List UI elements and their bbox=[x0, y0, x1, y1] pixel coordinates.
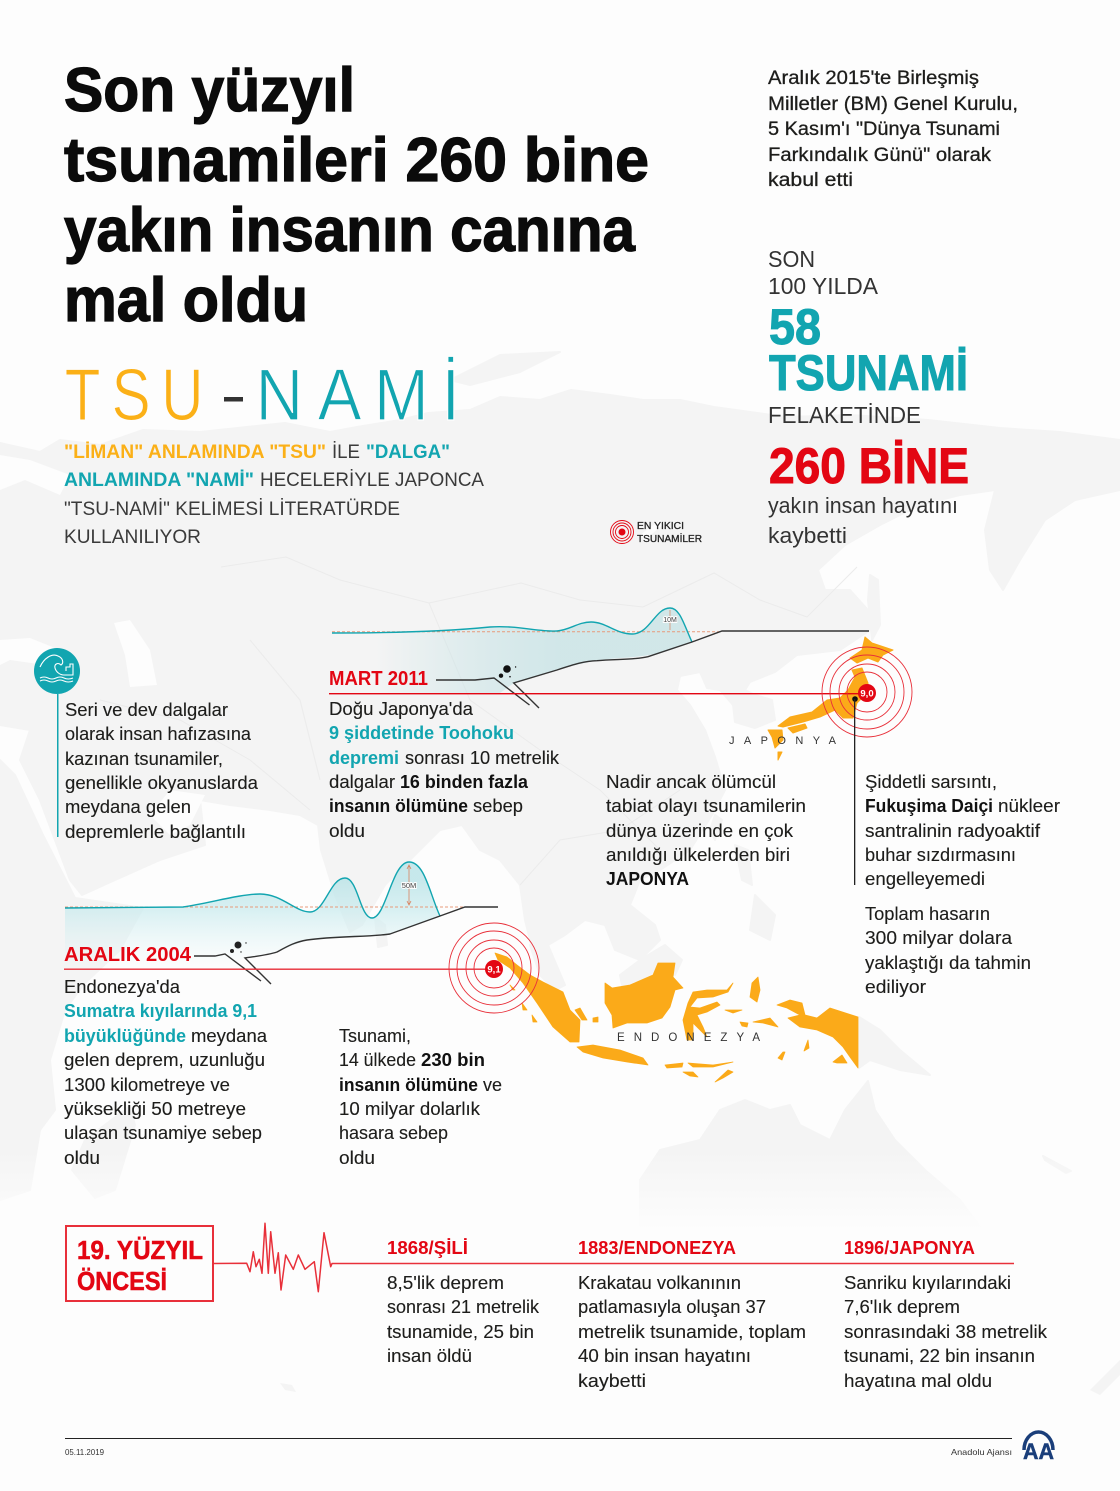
logo: AA: AA bbox=[1023, 1439, 1054, 1464]
TSU-NAMI wordmark: TSU bbox=[65, 355, 203, 437]
event 1883 Indonesia: metrelik tsunamide, toplam bbox=[578, 1322, 806, 1342]
map: Indonesia bbox=[495, 953, 858, 1082]
epicentre: Japan 9,0 bbox=[822, 647, 912, 737]
event 1883 Indonesia: 1883/ENDONEZYA bbox=[578, 1238, 736, 1258]
event 1883 Indonesia: kaybetti bbox=[578, 1371, 646, 1391]
footer rule bbox=[65, 1438, 1012, 1439]
March 2011 text block: sonrası 10 metrelik bbox=[405, 748, 560, 768]
March 2011 text block: dalgalar bbox=[329, 772, 395, 792]
Japan note bbox=[606, 772, 806, 889]
intro paragraph: Seri ve dev dalgalar bbox=[65, 700, 228, 720]
title: Son yüzyıl bbox=[64, 56, 355, 125]
Fukushima note: Şiddetli sarsıntı, bbox=[865, 772, 997, 792]
damage note: Toplam hasarın bbox=[865, 904, 990, 924]
event 1896 Japan: sonrasındaki 38 metrelik bbox=[844, 1322, 1048, 1342]
key statistics: 260 BİNE bbox=[769, 438, 969, 494]
tsunami impact note: 10 milyar dolarlık bbox=[339, 1099, 481, 1119]
diagram: December 2004 tsunami profile bbox=[65, 862, 498, 984]
key statistics: kaybetti bbox=[768, 523, 847, 548]
label: Endonezya: ENDONEZYA bbox=[617, 1032, 760, 1044]
March 2011 text block: 16 binden fazla bbox=[400, 772, 529, 792]
December 2004 text block: 1300 kilometreye ve bbox=[64, 1075, 230, 1095]
December 2004 text block: Endonezya'da bbox=[64, 977, 181, 997]
March 2011 text block: sebep bbox=[473, 796, 523, 816]
intro note: Milletler (BM) Genel Kurulu, bbox=[768, 93, 1018, 115]
tsunami impact note: oldu bbox=[339, 1148, 375, 1168]
key statistics: yakın insan hayatını bbox=[768, 493, 958, 518]
event 1868 Chile: insan öldü bbox=[387, 1346, 472, 1366]
etymology text: "LİMAN" ANLAMINDA "TSU" bbox=[64, 442, 326, 463]
legend: most destructive tsunamis bbox=[610, 520, 702, 545]
event 1868 Chile: sonrası 21 metrelik bbox=[387, 1297, 540, 1317]
legend: most destructive tsunamis: EN YIKICI bbox=[637, 520, 684, 532]
key statistics: SON bbox=[768, 246, 815, 272]
Fukushima note: santralinin radyoaktif bbox=[865, 821, 1041, 841]
intro paragraph: meydana gelen bbox=[65, 797, 191, 817]
damage note: ediliyor bbox=[865, 977, 926, 997]
event 1868 Chile: 1868/ŞİLİ bbox=[387, 1238, 468, 1258]
December 2004 text block: ulaşan tsunamiye sebep bbox=[64, 1123, 262, 1143]
event 1868 Chile: 8,5'lik deprem bbox=[387, 1273, 504, 1293]
etymology text: "TSU-NAMİ" KELİMESİ LİTERATÜRDE bbox=[64, 499, 400, 520]
legend: most destructive tsunamis: TSUNAMİLER bbox=[637, 532, 702, 545]
box: pre-19th century bbox=[66, 1226, 213, 1301]
intro paragraph: depremlerle bağlantılı bbox=[65, 822, 246, 842]
diagram: March 2011 tsunami profile: 10M bbox=[663, 617, 677, 624]
event 1896 Japan: Sanriku kıyılarındaki bbox=[844, 1273, 1011, 1293]
December 2004 text block: oldu bbox=[64, 1148, 100, 1168]
Japan note: JAPONYA bbox=[606, 869, 689, 889]
seismograph timeline line bbox=[213, 1223, 1014, 1292]
event 1868 Chile bbox=[387, 1238, 540, 1366]
etymology text: İLE bbox=[332, 442, 360, 463]
event 1883 Indonesia: Krakatau volkanının bbox=[578, 1273, 741, 1293]
etymology text: "DALGA" bbox=[366, 442, 450, 463]
intro note bbox=[768, 67, 1018, 191]
tsunami impact note: ve bbox=[483, 1075, 502, 1095]
December 2004 text block bbox=[64, 944, 268, 1168]
title: tsunamileri 260 bine bbox=[64, 126, 649, 195]
event 1896 Japan: 7,6'lık deprem bbox=[844, 1297, 960, 1317]
event 1896 Japan: 1896/JAPONYA bbox=[844, 1238, 975, 1258]
key statistics: 58 bbox=[769, 299, 821, 355]
event 1883 Indonesia bbox=[578, 1238, 806, 1391]
tsunami impact note: Tsunami, bbox=[339, 1026, 411, 1046]
TSU-NAMI wordmark: NAMİ bbox=[256, 354, 460, 436]
event 1896 Japan: hayatına mal oldu bbox=[844, 1371, 992, 1391]
intro paragraph bbox=[65, 700, 259, 842]
key statistics: 100 YILDA bbox=[768, 273, 879, 299]
key statistics: TSUNAMİ bbox=[769, 345, 968, 401]
intro paragraph: kazınan tsunamiler, bbox=[65, 749, 223, 769]
box: pre-19th century: ÖNCESİ bbox=[77, 1266, 167, 1296]
etymology text: ANLAMINDA "NAMİ" bbox=[64, 470, 254, 491]
Japan note: Nadir ancak ölümcül bbox=[606, 772, 776, 792]
title: mal oldu bbox=[64, 266, 308, 335]
damage note: 300 milyar dolara bbox=[865, 928, 1013, 948]
December 2004 text block: büyüklüğünde bbox=[64, 1026, 186, 1046]
Fukushima pointer bbox=[852, 696, 858, 885]
tsunami impact note: insanın ölümüne bbox=[339, 1075, 478, 1095]
December 2004 text block: meydana bbox=[191, 1026, 268, 1046]
intro note: Aralık 2015'te Birleşmiş bbox=[768, 67, 979, 89]
event 1896 Japan: tsunami, 22 bin insanın bbox=[844, 1346, 1035, 1366]
title bbox=[64, 56, 649, 335]
credit: Anadolu Ajansı bbox=[951, 1447, 1012, 1457]
box: pre-19th century: 19. YÜZYIL bbox=[77, 1235, 203, 1265]
etymology text: KULLANILIYOR bbox=[64, 527, 201, 548]
Japan note: dünya üzerinde en çok bbox=[606, 821, 794, 841]
Japan note: tabiat olayı tsunamilerin bbox=[606, 796, 806, 816]
event 1883 Indonesia: 40 bin insan hayatını bbox=[578, 1346, 751, 1366]
tsunami impact note: 14 ülkede bbox=[339, 1050, 416, 1070]
diagram: December 2004 tsunami profile: 50M bbox=[402, 881, 416, 890]
Fukushima note: Fukuşima Daiçi bbox=[865, 796, 993, 816]
date: 05.11.2019 bbox=[65, 1447, 104, 1457]
March 2011 text block: 9 şiddetinde Toohoku bbox=[329, 723, 514, 743]
title: yakın insanın canına bbox=[64, 196, 635, 265]
label: Japonya: JAPONYA bbox=[729, 735, 837, 747]
icon: wave in teal circle bbox=[34, 648, 80, 694]
event 1868 Chile: tsunamide, 25 bin bbox=[387, 1322, 534, 1342]
event 1896 Japan bbox=[844, 1238, 1048, 1391]
epicentre: Sumatra 9,1: 9,1 bbox=[487, 964, 501, 976]
intro note: kabul etti bbox=[768, 169, 853, 191]
March 2011 text block: Doğu Japonya'da bbox=[329, 699, 474, 719]
map: Japan bbox=[768, 637, 893, 760]
December 2004 text block: gelen deprem, uzunluğu bbox=[64, 1050, 265, 1070]
epicentre: Japan 9,0: 9,0 bbox=[860, 688, 874, 700]
intro paragraph: genellikle okyanuslarda bbox=[65, 773, 259, 793]
intro paragraph: olarak insan hafızasına bbox=[65, 724, 252, 744]
key statistics bbox=[768, 246, 969, 548]
damage note bbox=[865, 904, 1031, 997]
March 2011 text block bbox=[329, 668, 560, 841]
diagram: March 2011 tsunami profile bbox=[332, 608, 869, 708]
March 2011 text block: depremi bbox=[329, 748, 399, 768]
March 2011 text block: oldu bbox=[329, 821, 365, 841]
etymology text bbox=[64, 442, 484, 548]
Fukushima note: nükleer bbox=[998, 796, 1060, 816]
tsunami impact note: hasara sebep bbox=[339, 1123, 448, 1143]
Fukushima note bbox=[865, 772, 1060, 889]
TSU-NAMI wordmark bbox=[65, 354, 460, 437]
damage note: yaklaştığı da tahmin bbox=[865, 953, 1031, 973]
world map background bbox=[0, 352, 1120, 1395]
etymology text: HECELERİYLE JAPONCA bbox=[260, 470, 484, 491]
intro note: Farkındalık Günü" olarak bbox=[768, 144, 991, 166]
March 2011 text block: insanın ölümüne bbox=[329, 796, 468, 816]
tsunami impact note bbox=[339, 1026, 502, 1168]
December 2004 text block: ARALIK 2004 bbox=[64, 944, 192, 966]
teal connector line bbox=[57, 694, 58, 837]
Fukushima note: buhar sızdırmasını bbox=[865, 845, 1016, 865]
event 1883 Indonesia: patlamasıyla oluşan 37 bbox=[578, 1297, 766, 1317]
epicentre: Sumatra 9,1 bbox=[449, 923, 539, 1013]
tsunami impact note: 230 bin bbox=[421, 1050, 485, 1070]
December 2004 text block: yüksekliği 50 metreye bbox=[64, 1099, 246, 1119]
December 2004 text block: Sumatra kıyılarında 9,1 bbox=[64, 1001, 257, 1021]
Fukushima note: engelleyemedi bbox=[865, 869, 985, 889]
key statistics: FELAKETİNDE bbox=[768, 402, 921, 428]
intro note: 5 Kasım'ı "Dünya Tsunami bbox=[768, 118, 1000, 140]
red line: December 2004 bbox=[64, 968, 486, 970]
red line: March 2011 bbox=[329, 693, 859, 694]
March 2011 text block: MART 2011 bbox=[329, 668, 428, 690]
Japan note: anıldığı ülkelerden biri bbox=[606, 845, 790, 865]
